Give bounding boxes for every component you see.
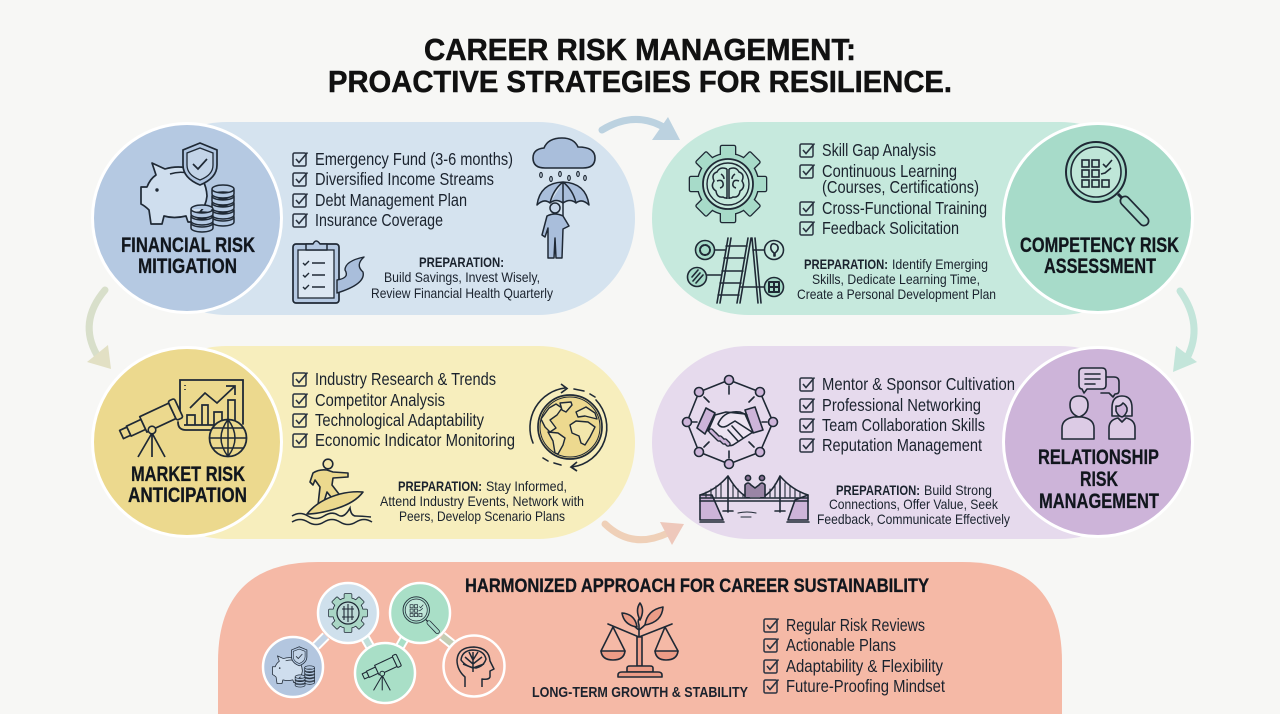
title — [328, 32, 952, 99]
checklist: market: Competitor Analysis — [315, 390, 445, 410]
panel: harmonized approach — [218, 562, 1062, 714]
checklist: relationship: Professional Networking — [822, 395, 981, 415]
preparation: market: Attend Industry Events, Network with — [380, 493, 584, 509]
checklist: market — [293, 369, 515, 450]
panel: relationship risk management — [652, 346, 1192, 539]
checklist: relationship: Team Collaboration Skills — [822, 415, 985, 435]
preparation: relationship: Connections, Offer Value, Seek — [829, 496, 999, 512]
heading: relationship risk management: MANAGEMENT — [1039, 490, 1159, 513]
checklist: relationship: Reputation Management — [822, 435, 982, 455]
competency circle badge — [1004, 124, 1192, 312]
checklist: financial: Diversified Income Streams — [315, 169, 494, 189]
checklist: harmonized: Adaptability & Flexibility — [786, 656, 943, 676]
financial circle badge — [92, 124, 282, 312]
mini icon: gear — [329, 594, 367, 632]
icon: telescope, chart board and globe — [117, 380, 246, 457]
preparation: financial: PREPARATION: — [419, 254, 504, 270]
icon: piggy bank with shield and coins — [141, 143, 234, 232]
mini icon: piggy bank — [272, 647, 315, 687]
checklist: relationship: Mentor & Sponsor Cultivation — [822, 374, 1015, 394]
checklist: harmonized: Regular Risk Reviews — [786, 615, 925, 635]
heading: financial risk mitigation: MITIGATION — [138, 255, 237, 278]
title: CAREER RISK MANAGEMENT: — [424, 32, 856, 67]
checklist: market: Technological Adaptability — [315, 410, 484, 430]
icon: magnifier over checklist grid — [1066, 142, 1144, 221]
icon: person with umbrella in rain — [533, 138, 595, 258]
checklist: financial: Insurance Coverage — [315, 210, 443, 230]
heading: market risk anticipation — [128, 463, 247, 507]
preparation: relationship: Build Strong — [924, 482, 992, 498]
preparation: relationship — [817, 482, 1010, 527]
market circle badge — [92, 348, 282, 536]
graphic: connected risk icons — [263, 583, 504, 703]
icon: handshake in network ring — [682, 376, 778, 468]
preparation: competency: Identify Emerging — [892, 256, 988, 272]
heading: financial risk mitigation: FINANCIAL RISK — [121, 234, 255, 257]
heading: relationship risk management: RELATIONSHIP — [1038, 446, 1159, 469]
heading: market risk anticipation: MARKET RISK — [131, 463, 245, 486]
checklist: financial: Emergency Fund (3-6 months) — [315, 149, 513, 169]
icon: globe with cycle arrows — [530, 384, 607, 471]
icon: surfer on a wave — [292, 459, 372, 524]
arrow: financial to competency — [602, 117, 680, 140]
preparation: financial: Build Savings, Invest Wisely, — [384, 269, 540, 285]
preparation: competency: Create a Personal Development Plan — [797, 286, 996, 302]
checklist: competency — [800, 140, 987, 238]
checklist: harmonized — [764, 615, 945, 696]
arrow: competency to relationship — [1173, 291, 1197, 372]
heading: market risk anticipation: ANTICIPATION — [128, 484, 247, 507]
checklist: relationship — [800, 374, 1015, 455]
checklist: competency: Continuous Learning — [822, 161, 957, 181]
checklist: competency: Skill Gap Analysis — [822, 140, 936, 160]
checklist: competency: Feedback Solicitation — [822, 218, 959, 238]
label: long-term growth: LONG-TERM GROWTH & STABILITY — [532, 684, 748, 701]
mini icon: magnifier — [403, 597, 437, 632]
checklist: competency: (Courses, Certifications) — [822, 177, 979, 197]
heading: relationship risk management: RISK — [1080, 468, 1118, 491]
icon: ladder with skill badges — [688, 238, 784, 303]
preparation: competency: PREPARATION: — [804, 256, 888, 272]
checklist: market: Industry Research & Trends — [315, 369, 496, 389]
mini icon: head with brain tree — [457, 647, 494, 687]
heading: financial risk mitigation — [121, 234, 255, 278]
panel: financial risk mitigation — [92, 122, 635, 315]
checklist: financial — [293, 149, 513, 230]
arrow: market to relationship — [605, 522, 684, 545]
icon: balance scale with plant — [601, 603, 678, 677]
icon: clipboard with arrow — [293, 241, 364, 303]
panel: competency risk assessment — [652, 122, 1192, 315]
checklist: financial: Debt Management Plan — [315, 190, 467, 210]
checklist: competency: Cross-Functional Training — [822, 198, 987, 218]
relationship circle badge — [1004, 348, 1192, 536]
mini icon: telescope — [361, 654, 402, 690]
preparation: financial — [371, 254, 553, 301]
panel: market risk anticipation — [92, 346, 635, 539]
arrow: financial to market — [87, 290, 111, 369]
icon: gear with brain — [690, 146, 766, 222]
heading: harmonized approach: HARMONIZED APPROACH FOR CAREER SUSTAINABILITY — [465, 575, 929, 597]
checklist: market: Economic Indicator Monitoring — [315, 430, 515, 450]
checklist: harmonized: Future-Proofing Mindset — [786, 676, 945, 696]
preparation: financial: Review Financial Health Quarterly — [371, 285, 553, 301]
preparation: market: PREPARATION: — [398, 478, 482, 494]
heading: competency risk assessment: ASSESSMENT — [1044, 255, 1156, 278]
preparation: market: Stay Informed, — [486, 478, 567, 494]
heading: competency risk assessment: COMPETENCY RISK — [1020, 234, 1179, 257]
preparation: market — [380, 478, 584, 524]
preparation: relationship: PREPARATION: — [836, 482, 920, 498]
icon: two people talking — [1062, 368, 1135, 439]
preparation: competency — [797, 256, 996, 302]
checklist: harmonized: Actionable Plans — [786, 635, 896, 655]
preparation: market: Peers, Develop Scenario Plans — [399, 508, 565, 524]
preparation: relationship: Feedback, Communicate Effectively — [817, 511, 1010, 527]
icon: bridge with two people — [700, 475, 809, 522]
preparation: competency: Skills, Dedicate Learning Time, — [812, 271, 980, 287]
title: PROACTIVE STRATEGIES FOR RESILIENCE. — [328, 64, 952, 99]
heading: relationship risk management — [1038, 446, 1159, 513]
heading: competency risk assessment — [1020, 234, 1179, 278]
